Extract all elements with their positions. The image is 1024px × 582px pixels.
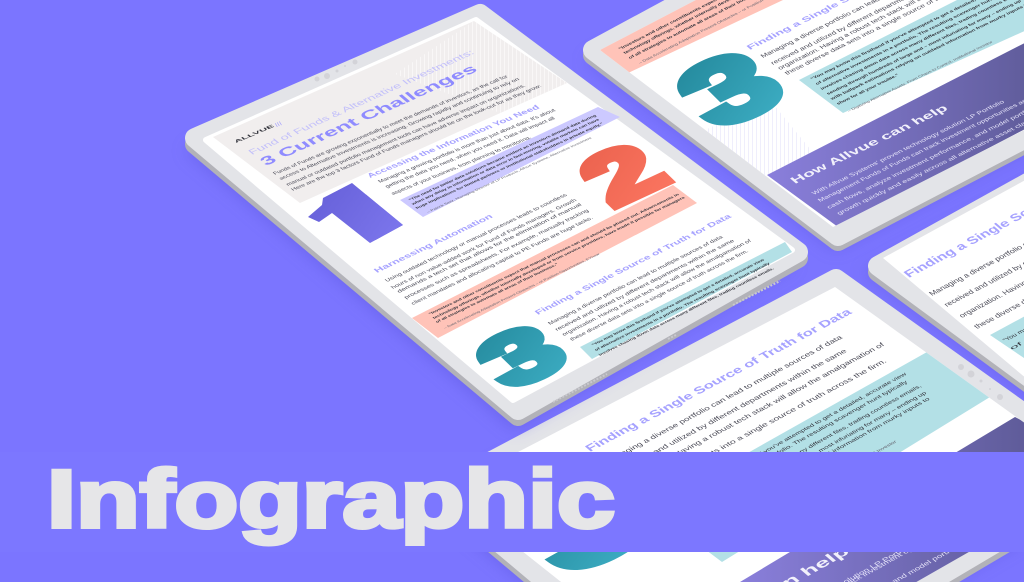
teal quote text: show for all your trouble.”: [835, 73, 900, 106]
camera dots: [958, 364, 1003, 400]
teal quote text: involves chasing down data across many different files, trading countless emails,: [819, 0, 1022, 91]
intro paragraph: access to Alternative Investments is increasing. Growing rapidly and continuing to rely on: [278, 77, 521, 181]
section 2 body: hours of non value-added work for Fund of Funds managers. Growth: [390, 198, 578, 290]
tablet 4: right, cropped: [868, 174, 1024, 392]
quote text: sending through hundreds of large and – most infuriating for many – ending up: [699, 391, 929, 519]
tablet body: [195, 14, 798, 416]
section 3 body: these diverse data sets into a single source of truth across the firm.: [569, 249, 751, 342]
logo: [233, 120, 285, 144]
section 2 body: [384, 193, 595, 306]
camera dots: [314, 60, 358, 82]
pink quote box: [600, 0, 783, 74]
section 1 body: aspects of your business, from planning to monitoring.: [390, 136, 533, 196]
section 3 body: organization. Having a robust tech stack will allow the amalgamation of: [561, 239, 753, 337]
logo: ///: [272, 120, 285, 128]
teal quote text: with ballpark estimations relying on outdated information from murky inputs to: [828, 2, 1024, 101]
section 3 quote box: involves chasing down data across many different files, trading countless emails.: [597, 267, 775, 357]
section 1 body: Managing a growing portfolio is more than just about data. It's about: [377, 108, 557, 184]
help copy: growth quickly and easily across all alternative asset classes.: [836, 112, 1024, 216]
intro paragraph: manual or outdated portfolio management tools can have adverse impact on organizations.: [285, 84, 528, 187]
stripes: [708, 108, 809, 176]
teal quote text: – Digitizing Alternative Assets: From Chaos to Control, Institutional Investor: [846, 40, 994, 113]
headline: Infographic: [47, 454, 615, 545]
help heading: How Allvue can help: [787, 102, 951, 186]
header panel: [213, 21, 567, 203]
tablet 1: main tablet: [185, 14, 798, 430]
teal quote text: [809, 0, 1024, 113]
section 3 quote box: “You may know this firsthand if you've attempted to get a detailed, accurate view: [590, 257, 766, 347]
section 1 quote box: “The need for better data solutions became evident as investors demand data during: [407, 113, 598, 202]
section 3 heading: Finding a Single Source of Truth for Data: [533, 212, 733, 316]
intro paragraph: Here are the top 3 factors Fund of Funds managers should be on the look-out for as they grow:: [290, 84, 544, 192]
help heading and copy: [783, 552, 950, 582]
help copy: Management Funds of Funds can track investment opportunities and: [817, 96, 1024, 203]
section 1 body: getting the data you need, when you need it. Data will impact all: [384, 117, 557, 189]
intro paragraph: Funds of Funds are growing exponentially to meet the demands of investors, as the call for: [272, 75, 510, 176]
quote text: involves chasing down data across many different files, trading countless emails,: [687, 384, 924, 516]
header stripes: [395, 21, 567, 113]
section 1 quote box: – Patrick Seitz, Managing Director of LP Products, Allvue Systems, Alternative Investment: [426, 137, 592, 214]
body text: received and utilized by different departments within the same: [617, 348, 849, 473]
body text: [622, 336, 886, 452]
section 2 body: Using outdated technology or manual processes leads to countless: [384, 193, 569, 283]
section 1 quote box: huge implications for limited partners or institutional stakeholders in private equity.”: [414, 122, 604, 210]
title: Fund of Funds & Alternative Investments:: [247, 49, 477, 157]
section 2 quote box: “Investors and other constituents expect that manual processes can and should be phased out. Advancements in: [427, 192, 681, 316]
quote text: – Digitizing Alternative Assets: From Chaos to Control, Institutional Investor: [719, 439, 899, 540]
section 3 quote box: [580, 242, 792, 359]
body text: these diverse data sets into a single source of truth across the firm.: [627, 358, 889, 499]
digit 3: 3: [456, 309, 586, 403]
speaker grilles: [553, 281, 780, 402]
help copy: cash flows, analyze investment performance, and model portfolio: [826, 104, 1024, 210]
purple help box: [767, 30, 1024, 227]
section 2 quote box: [412, 185, 697, 338]
purple help box: [735, 417, 1024, 582]
section 3 body: received and utilized by different departments within the same: [554, 239, 737, 332]
title: 3 Current Challenges: [256, 62, 481, 168]
tablet 3: bottom centre: [425, 279, 1024, 582]
section 3 body: Managing a diverse portfolio can lead to multiple sources of data: [547, 235, 725, 326]
body text: organization. Having a robust tech stack will allow the amalgamation of: [622, 341, 887, 484]
title: [247, 49, 481, 168]
teal quote text: of alternative investments in a portfolio. The resulting scavenger hunt typically: [814, 0, 1018, 86]
heading: Finding a Single Source of Truth for Data: [582, 306, 856, 454]
tablet 2: top right: [585, 0, 1024, 250]
section 1 heading: Accessing the Information You Need: [365, 103, 542, 179]
digit 3: 3: [652, 31, 807, 146]
section 3 quote box: of alternative investments in a portfolio. The resulting scavenger hunt typically: [593, 261, 772, 352]
teal quote text: sending through hundreds of large and – most infuriating for many – ending up: [825, 0, 1022, 96]
logo: ALLVUE: [233, 124, 277, 144]
help copy: With Allvue Systems' proven technology solution LP Portfolio: [811, 99, 1007, 196]
section 2 heading: Harnessing Automation: [372, 212, 495, 274]
teal quote box: [799, 0, 1024, 113]
quote text: with ballpark estimations relying on outdated information from murky inputs to: [696, 397, 932, 529]
section 2 body: client mandates and allocating capital to PE Funds are huge tasks.: [410, 216, 595, 306]
section 2 body: processes such as spreadsheets. For example, manually tracking: [403, 209, 590, 300]
title band: [0, 452, 1024, 552]
section 2 quote box: technology offerings, whether internally developed or from service providers, have made it possible for managers: [431, 195, 687, 320]
digit 2: 2: [559, 128, 686, 220]
teal quote box: [708, 352, 989, 562]
quote text: [760, 372, 930, 452]
section 2 quote box: of all strategies to automate all areas of their business.”: [434, 262, 559, 324]
quote text: “You may know this firsthand if you've attempted to get a detailed, accurate view: [672, 372, 909, 504]
tablet shadow: [185, 30, 795, 430]
digit 1: 1: [316, 172, 446, 257]
body text: Managing a diverse portfolio can lead to multiple sources of data: [602, 334, 845, 465]
section 1 quote box: [400, 107, 620, 217]
quote text: of alternative investments in a portfolio. The resulting scavenger hunt typically: [673, 380, 909, 512]
section 1 quote box: when any delay in information or data error in fast-moving, volatile markets can have: [409, 117, 601, 206]
section 2 quote box: – Data Accelerating Adaptation Present Obstacles – or Position Opportunities, EYnow: [443, 252, 601, 330]
section 2 body: demands a tech set that allows for the elimination of manual: [396, 203, 583, 294]
